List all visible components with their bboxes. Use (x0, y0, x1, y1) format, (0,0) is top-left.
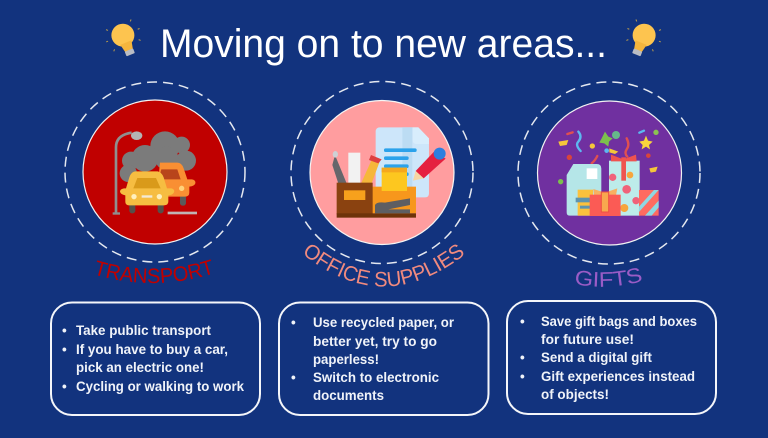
panel: gifts (517, 81, 701, 287)
text box: office supplies tips (279, 302, 488, 415)
title: Moving on to new areas... (160, 22, 607, 66)
bullet list: transport: • (62, 342, 67, 357)
bullet list: transport: pick an electric one! (76, 360, 204, 375)
bullet list: transport: Take public transport (76, 323, 211, 338)
bullet list: gifts: for future use! (541, 332, 634, 347)
bullet list: office supplies: better yet, try to go (313, 334, 437, 349)
icon: cars and smog (113, 131, 197, 215)
bullet list: transport (62, 323, 244, 394)
circle: office supplies background (310, 100, 454, 244)
bullet list: transport: • (62, 379, 67, 394)
bullet list: office supplies: Use recycled paper, or (313, 315, 455, 330)
bullet list: office supplies: • (291, 370, 296, 385)
bullet list: office supplies: Switch to electronic (313, 370, 439, 385)
panel: office supplies (290, 80, 474, 287)
bullet list: gifts: Gift experiences instead (541, 369, 695, 384)
icon: office supplies (332, 127, 446, 218)
bullet list: gifts: of objects! (541, 387, 609, 402)
dashed ring: transport (65, 82, 245, 262)
circle: transport background (83, 100, 227, 244)
label: gifts: GIFTS (576, 268, 642, 287)
panel: transport (64, 81, 246, 284)
icon: left light bulb (102, 18, 147, 61)
dashed ring: office supplies (291, 82, 473, 264)
bullet list: gifts: Send a digital gift (541, 350, 652, 365)
bullet list: office supplies: • (291, 315, 296, 330)
icon: right light bulb (620, 18, 665, 61)
bullet list: office supplies (291, 315, 455, 403)
bullet list: office supplies: documents (313, 388, 384, 403)
text box: gifts tips (507, 301, 716, 414)
icon: gifts and confetti (558, 130, 659, 216)
dashed ring: gifts (518, 82, 700, 264)
circle: gifts background (538, 101, 682, 245)
bullet list: gifts: • (520, 369, 525, 384)
bullet list: gifts (520, 314, 697, 402)
bullet list: office supplies: paperless! (313, 352, 379, 367)
bullet list: transport: Cycling or walking to work (76, 379, 244, 394)
bullet list: transport: If you have to buy a car, (76, 342, 228, 357)
bullet list: gifts: • (520, 350, 525, 365)
bullet list: transport: • (62, 323, 67, 338)
label: office supplies: OFFICE SUPPLIES (305, 244, 464, 287)
text box: transport tips (51, 302, 260, 415)
bullet list: gifts: Save gift bags and boxes (541, 314, 697, 329)
label: transport: TRANSPORT (96, 259, 211, 284)
bullet list: gifts: • (520, 314, 525, 329)
